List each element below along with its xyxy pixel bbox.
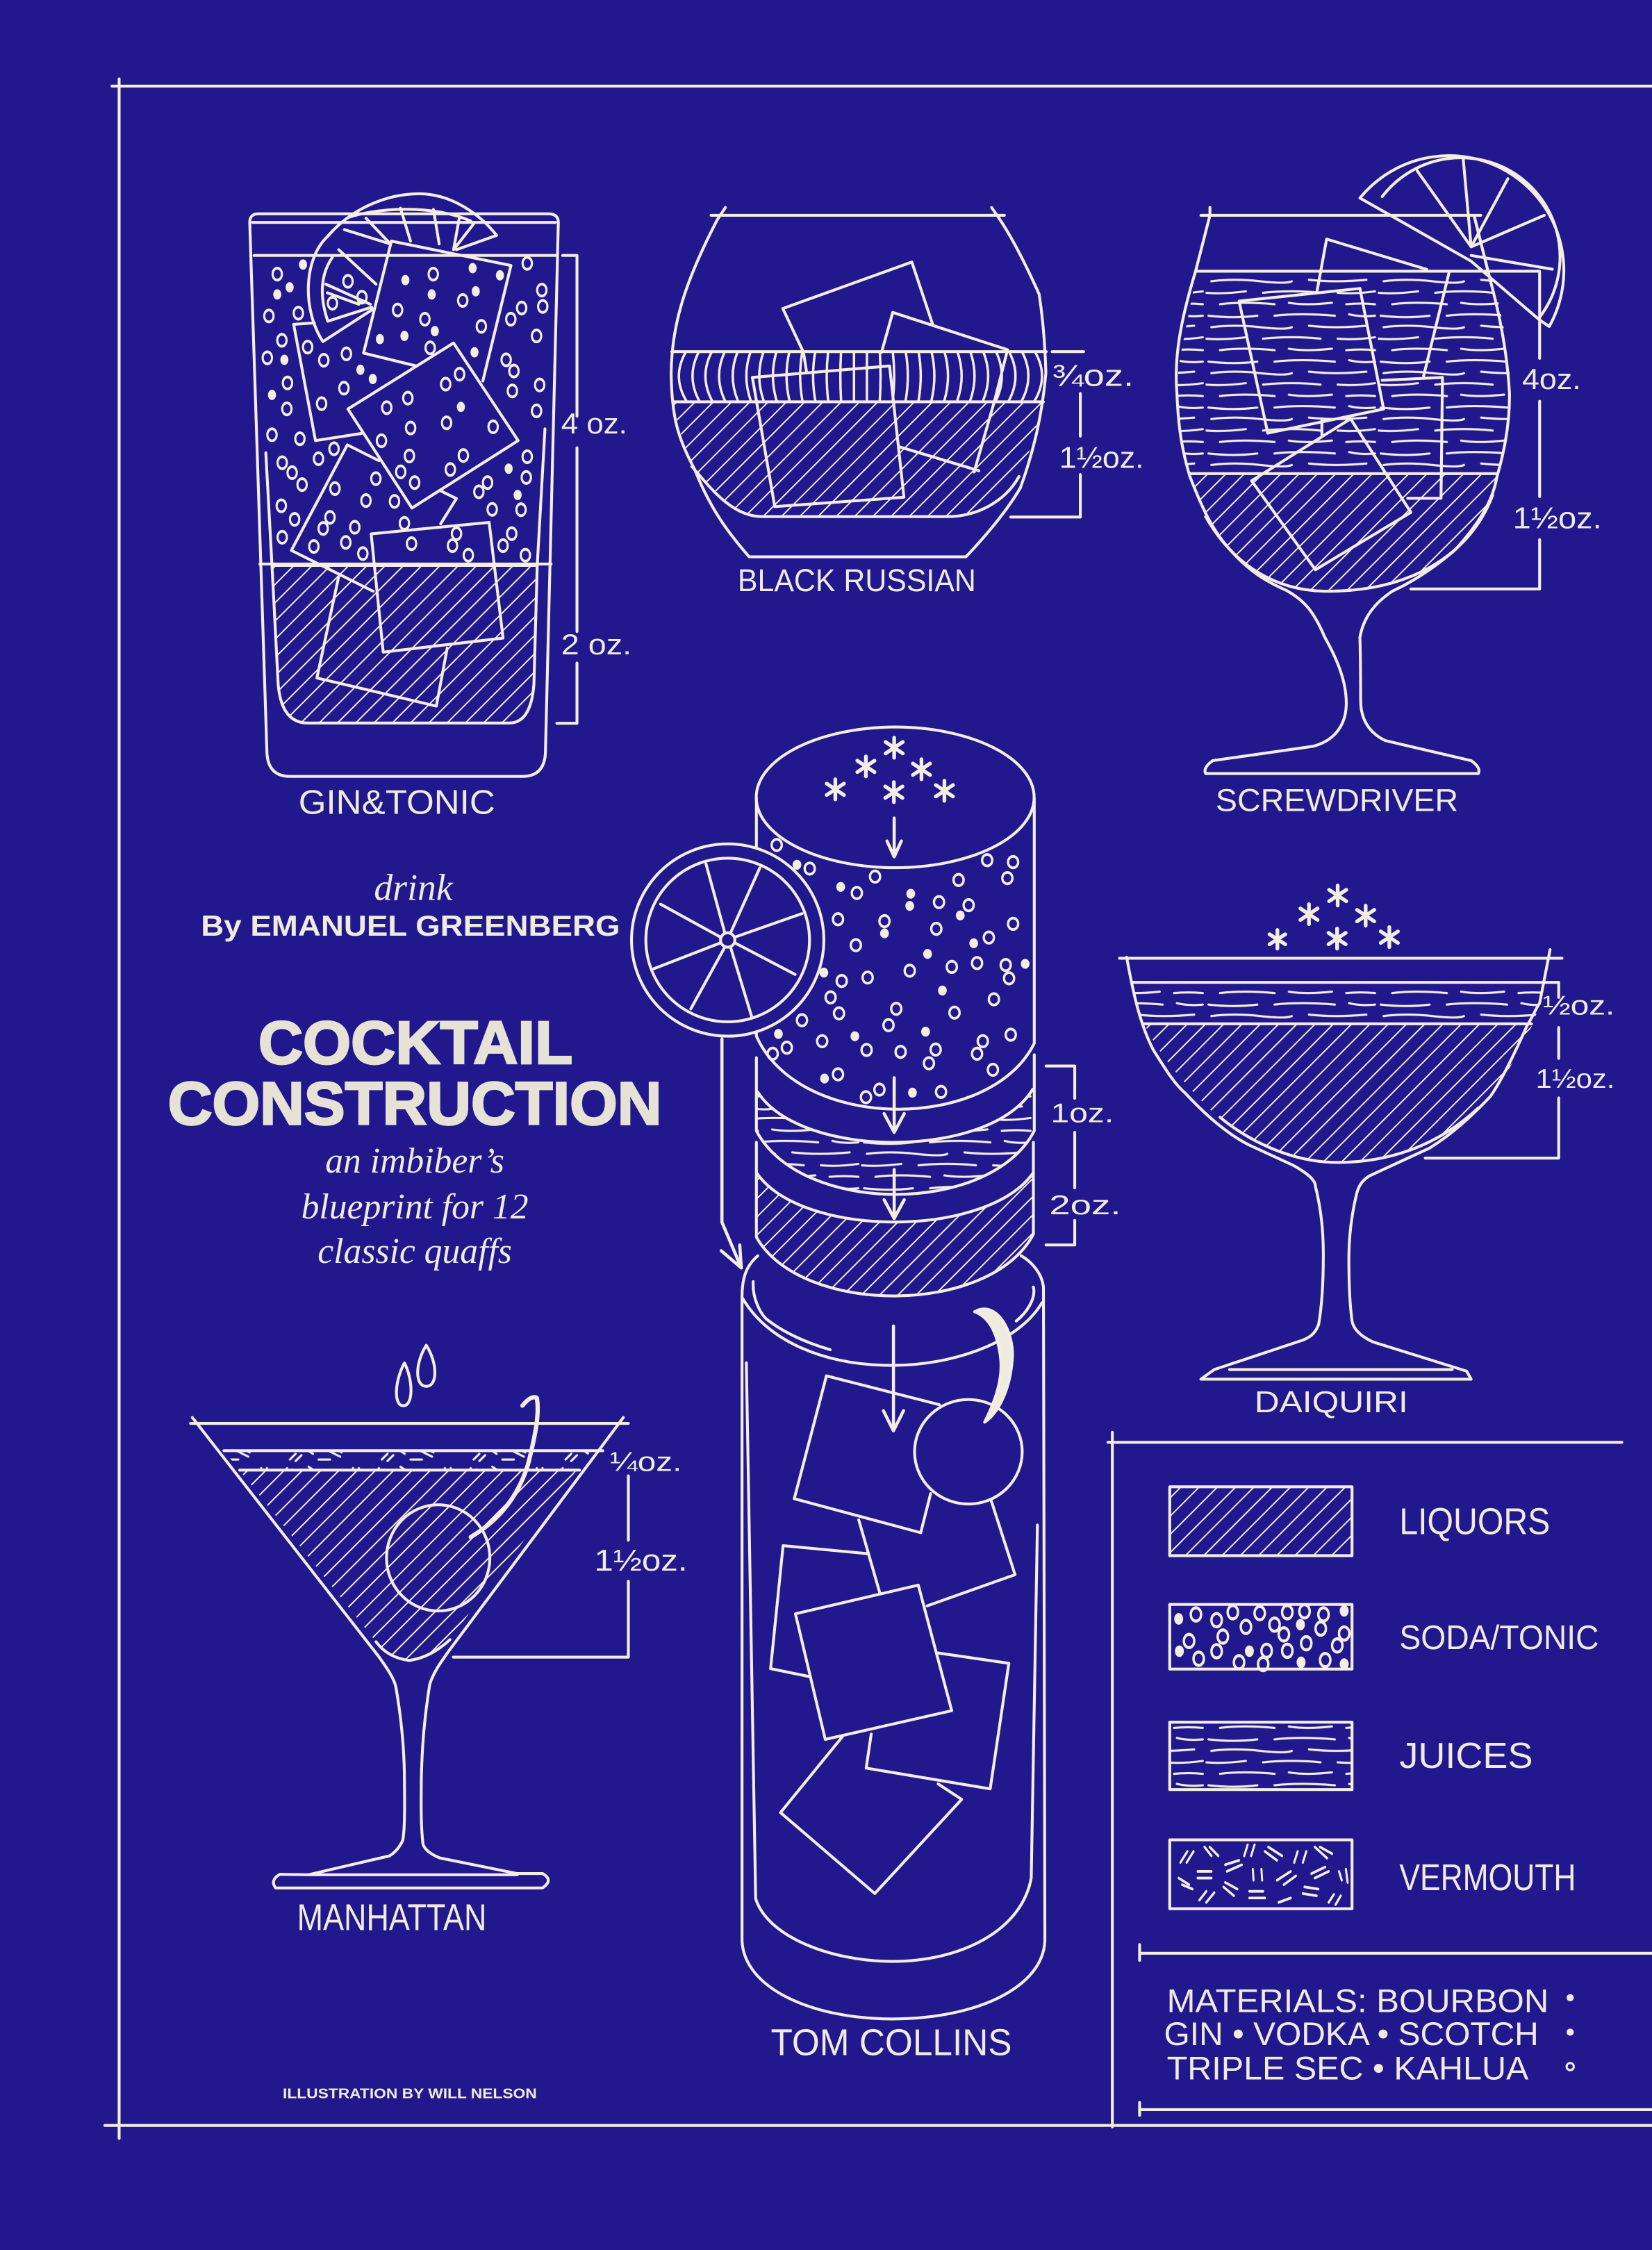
measure: black russian: ¾oz. [1052, 360, 1134, 393]
measure: manhattan: 1½oz. [594, 1544, 688, 1578]
legend: liquors [1170, 1487, 1550, 1555]
label: tom collins: TOM COLLINS [770, 2021, 1012, 2063]
measure: gin and tonic: 4 oz. [561, 408, 627, 440]
label: screwdriver: SCREWDRIVER [1216, 782, 1458, 818]
byline: By EMANUEL GREENBERG [201, 910, 620, 942]
subtitle [302, 1141, 529, 1271]
liquor fill [272, 565, 537, 723]
measure: gin and tonic [557, 256, 631, 723]
measure: manhattan [453, 1447, 688, 1657]
star garnish [1269, 886, 1398, 949]
kicker: drink: drink [374, 866, 454, 908]
label: daiquiri: DAIQUIRI [1255, 1386, 1408, 1419]
measure: gin and tonic: 2 oz. [561, 629, 631, 661]
soda layer [757, 727, 1034, 1109]
legend panel [1108, 1432, 1652, 2127]
ice cubes [770, 1376, 1015, 1894]
soda bubbles [263, 258, 547, 561]
measure: tom collins [1046, 1066, 1121, 1245]
kahlua band [679, 351, 1042, 400]
measure: manhattan: ¼oz. [610, 1447, 682, 1478]
ice cubes [291, 241, 518, 706]
measure: daiquiri [1426, 982, 1614, 1158]
measure: daiquiri: 1½oz. [1536, 1064, 1614, 1094]
bitters drops [397, 1346, 435, 1406]
measure: daiquiri: ½oz. [1543, 991, 1614, 1021]
star garnish [827, 738, 953, 802]
measure: black russian [1011, 351, 1144, 517]
subtitle: classic quaffs [317, 1232, 512, 1271]
glass: gin and tonic [249, 214, 559, 777]
lime wedge [308, 194, 497, 342]
legend: soda and tonic [1170, 1605, 1599, 1671]
measure: screwdriver [1411, 273, 1602, 589]
label: gin and tonic: GIN&TONIC [299, 782, 495, 821]
drink: daiquiri [1120, 886, 1562, 1379]
title: CONSTRUCTION [168, 1070, 661, 1138]
juice fill [1135, 991, 1541, 1018]
label: black russian: BLACK RUSSIAN [738, 563, 976, 598]
measure: tom collins: 2oz. [1049, 1190, 1121, 1221]
whiskey fill [243, 1471, 576, 1659]
glass: tom collins [742, 1256, 1045, 2019]
glass: screwdriver [1176, 208, 1510, 774]
legend: vermouth [1170, 1840, 1576, 1909]
measure: screwdriver: 4oz. [1522, 363, 1581, 395]
assembly arrows [721, 818, 905, 1431]
legend: juices: JUICES [1399, 1735, 1533, 1776]
vermouth fill [230, 1452, 589, 1469]
ice cubes [752, 262, 1007, 506]
vodka fill [674, 403, 1041, 515]
legend: liquors: LIQUORS [1399, 1501, 1550, 1543]
orange slice [1360, 156, 1564, 326]
measure: screwdriver: 1½oz. [1513, 502, 1602, 535]
legend: soda and tonic: SODA/TONIC [1399, 1618, 1599, 1657]
liquor fill [1146, 1025, 1533, 1161]
materials list: MATERIALS: BOURBON [1167, 1983, 1548, 2019]
legend: juices [1170, 1722, 1533, 1789]
drink: tom collins [631, 727, 1045, 2019]
glass: daiquiri [1120, 950, 1562, 1379]
cherry [386, 1397, 538, 1611]
title [168, 1009, 661, 1138]
orange wheel [631, 844, 824, 1036]
drink: gin and tonic [249, 194, 559, 777]
subtitle: an imbiber’s [325, 1141, 504, 1181]
drink: manhattan [190, 1346, 629, 1888]
legend: vermouth: VERMOUTH [1399, 1857, 1576, 1899]
subtitle: blueprint for 12 [302, 1187, 529, 1227]
juice layer [754, 1054, 1036, 1198]
label: manhattan: MANHATTAN [297, 1897, 486, 1939]
materials list: TRIPLE SEC • KAHLUA [1167, 2051, 1529, 2087]
drink: screwdriver [1170, 156, 1564, 774]
juice fill [1178, 279, 1510, 468]
glass: manhattan [190, 1418, 629, 1888]
ice cubes [1239, 239, 1449, 570]
glass: black russian [671, 208, 1046, 557]
cherry [914, 1309, 1022, 1504]
title: COCKTAIL [258, 1009, 572, 1077]
materials list [1164, 1983, 1573, 2087]
measure: tom collins: 1oz. [1050, 1098, 1114, 1129]
liquor layer [754, 1142, 1036, 1306]
materials list: GIN • VODKA • SCOTCH [1164, 2016, 1539, 2053]
illustration credit: ILLUSTRATION BY WILL NELSON [283, 2085, 537, 2101]
liquor fill [1195, 475, 1495, 590]
measure: black russian: 1½oz. [1059, 442, 1144, 475]
drink: black russian [668, 208, 1055, 557]
